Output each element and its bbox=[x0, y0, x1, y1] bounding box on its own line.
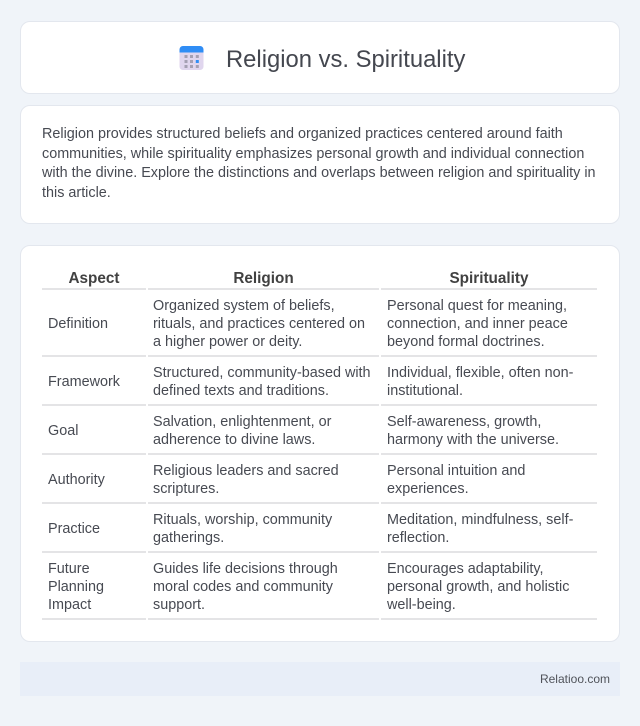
text: introduction paragraph: communities, while spirituality emphasizes personal growth and individual connection bbox=[42, 146, 584, 162]
spirituality: Authority bbox=[387, 463, 525, 497]
row: Future Planning Impact bbox=[48, 561, 569, 613]
religion: Practice: Rituals, worship, community bbox=[153, 512, 332, 528]
spirituality: Goal bbox=[387, 414, 559, 448]
religion: Authority: scriptures. bbox=[153, 481, 219, 497]
label: Framework: Framework bbox=[48, 374, 120, 390]
title: Religion vs. Spirituality bbox=[226, 46, 465, 73]
label: Goal: Goal bbox=[48, 423, 78, 439]
label: Authority: Authority bbox=[48, 472, 105, 488]
panel: introduction bbox=[20, 105, 620, 224]
spirituality: Authority: Personal intuition and bbox=[387, 463, 525, 479]
religion: Practice: gatherings. bbox=[153, 530, 224, 546]
religion: Future Planning Impact: moral codes and community bbox=[153, 579, 333, 595]
religion: Authority bbox=[153, 463, 339, 497]
text: introduction paragraph: with the divine. Explore the distinctions and overlaps between religion and spirituality in bbox=[42, 165, 596, 181]
spirituality: Framework bbox=[387, 365, 573, 399]
religion: Definition bbox=[153, 298, 365, 350]
religion: Definition: a higher power or deity. bbox=[153, 334, 302, 350]
panel: comparison table bbox=[20, 245, 620, 642]
religion: Framework: Structured, community-based with bbox=[153, 365, 371, 381]
icon: calendar bbox=[180, 46, 204, 70]
label: Future Planning Impact: Impact bbox=[48, 597, 91, 613]
religion: Authority: Religious leaders and sacred bbox=[153, 463, 339, 479]
row: Definition bbox=[48, 298, 568, 350]
spirituality: Future Planning Impact: personal growth, and holistic bbox=[387, 579, 569, 595]
label: Definition: Definition bbox=[48, 316, 108, 332]
footer brand text: Relatioo.com bbox=[540, 672, 610, 686]
label: Future Planning Impact bbox=[48, 561, 104, 613]
religion: Goal: Salvation, enlightenment, or bbox=[153, 414, 331, 430]
spirituality: Future Planning Impact: well-being. bbox=[387, 597, 456, 613]
religion: Definition: Organized system of beliefs, bbox=[153, 298, 335, 314]
spirituality: Future Planning Impact: Encourages adaptability, bbox=[387, 561, 544, 577]
spirituality: Definition: connection, and inner peace bbox=[387, 316, 568, 332]
table header row bbox=[68, 270, 529, 287]
religion: Definition: rituals, and practices centered on bbox=[153, 316, 365, 332]
religion: Framework bbox=[153, 365, 371, 399]
header: Religion: Religion bbox=[233, 270, 294, 287]
religion: Framework: defined texts and traditions. bbox=[153, 383, 329, 399]
footer bbox=[20, 662, 620, 696]
label: Practice: Practice bbox=[48, 521, 100, 537]
religion: Practice bbox=[153, 512, 332, 546]
religion: Future Planning Impact bbox=[153, 561, 338, 613]
text: introduction paragraph: this article. bbox=[42, 185, 111, 201]
row: Practice bbox=[48, 512, 573, 546]
header: Aspect: Aspect bbox=[68, 270, 120, 287]
row: Authority bbox=[48, 463, 525, 497]
text: introduction paragraph bbox=[42, 126, 596, 201]
spirituality: Authority: experiences. bbox=[387, 481, 469, 497]
spirituality: Definition: beyond formal doctrines. bbox=[387, 334, 545, 350]
text: introduction paragraph: Religion provides structured beliefs and organized practices centered around faith bbox=[42, 126, 563, 142]
spirituality: Future Planning Impact bbox=[387, 561, 569, 613]
row: Goal bbox=[48, 414, 559, 448]
spirituality: Goal: Self-awareness, growth, bbox=[387, 414, 541, 430]
header: Spirituality: Spirituality bbox=[449, 270, 529, 287]
spirituality: Definition: Personal quest for meaning, bbox=[387, 298, 567, 314]
spirituality: Framework: Individual, flexible, often non- bbox=[387, 365, 573, 381]
spirituality: Goal: harmony with the universe. bbox=[387, 432, 559, 448]
panel: title header bbox=[20, 21, 620, 94]
religion: Goal: adherence to divine laws. bbox=[153, 432, 315, 448]
row: Framework bbox=[48, 365, 573, 399]
religion: Goal bbox=[153, 414, 332, 448]
spirituality: Practice: reflection. bbox=[387, 530, 449, 546]
religion: Future Planning Impact: Guides life decisions through bbox=[153, 561, 338, 577]
spirituality: Practice: Meditation, mindfulness, self- bbox=[387, 512, 573, 528]
spirituality: Practice bbox=[387, 512, 573, 546]
label: Future Planning Impact: Planning bbox=[48, 579, 104, 595]
religion: Future Planning Impact: support. bbox=[153, 597, 205, 613]
spirituality: Definition bbox=[387, 298, 568, 350]
spirituality: Framework: institutional. bbox=[387, 383, 463, 399]
label: Future Planning Impact: Future bbox=[48, 561, 90, 577]
